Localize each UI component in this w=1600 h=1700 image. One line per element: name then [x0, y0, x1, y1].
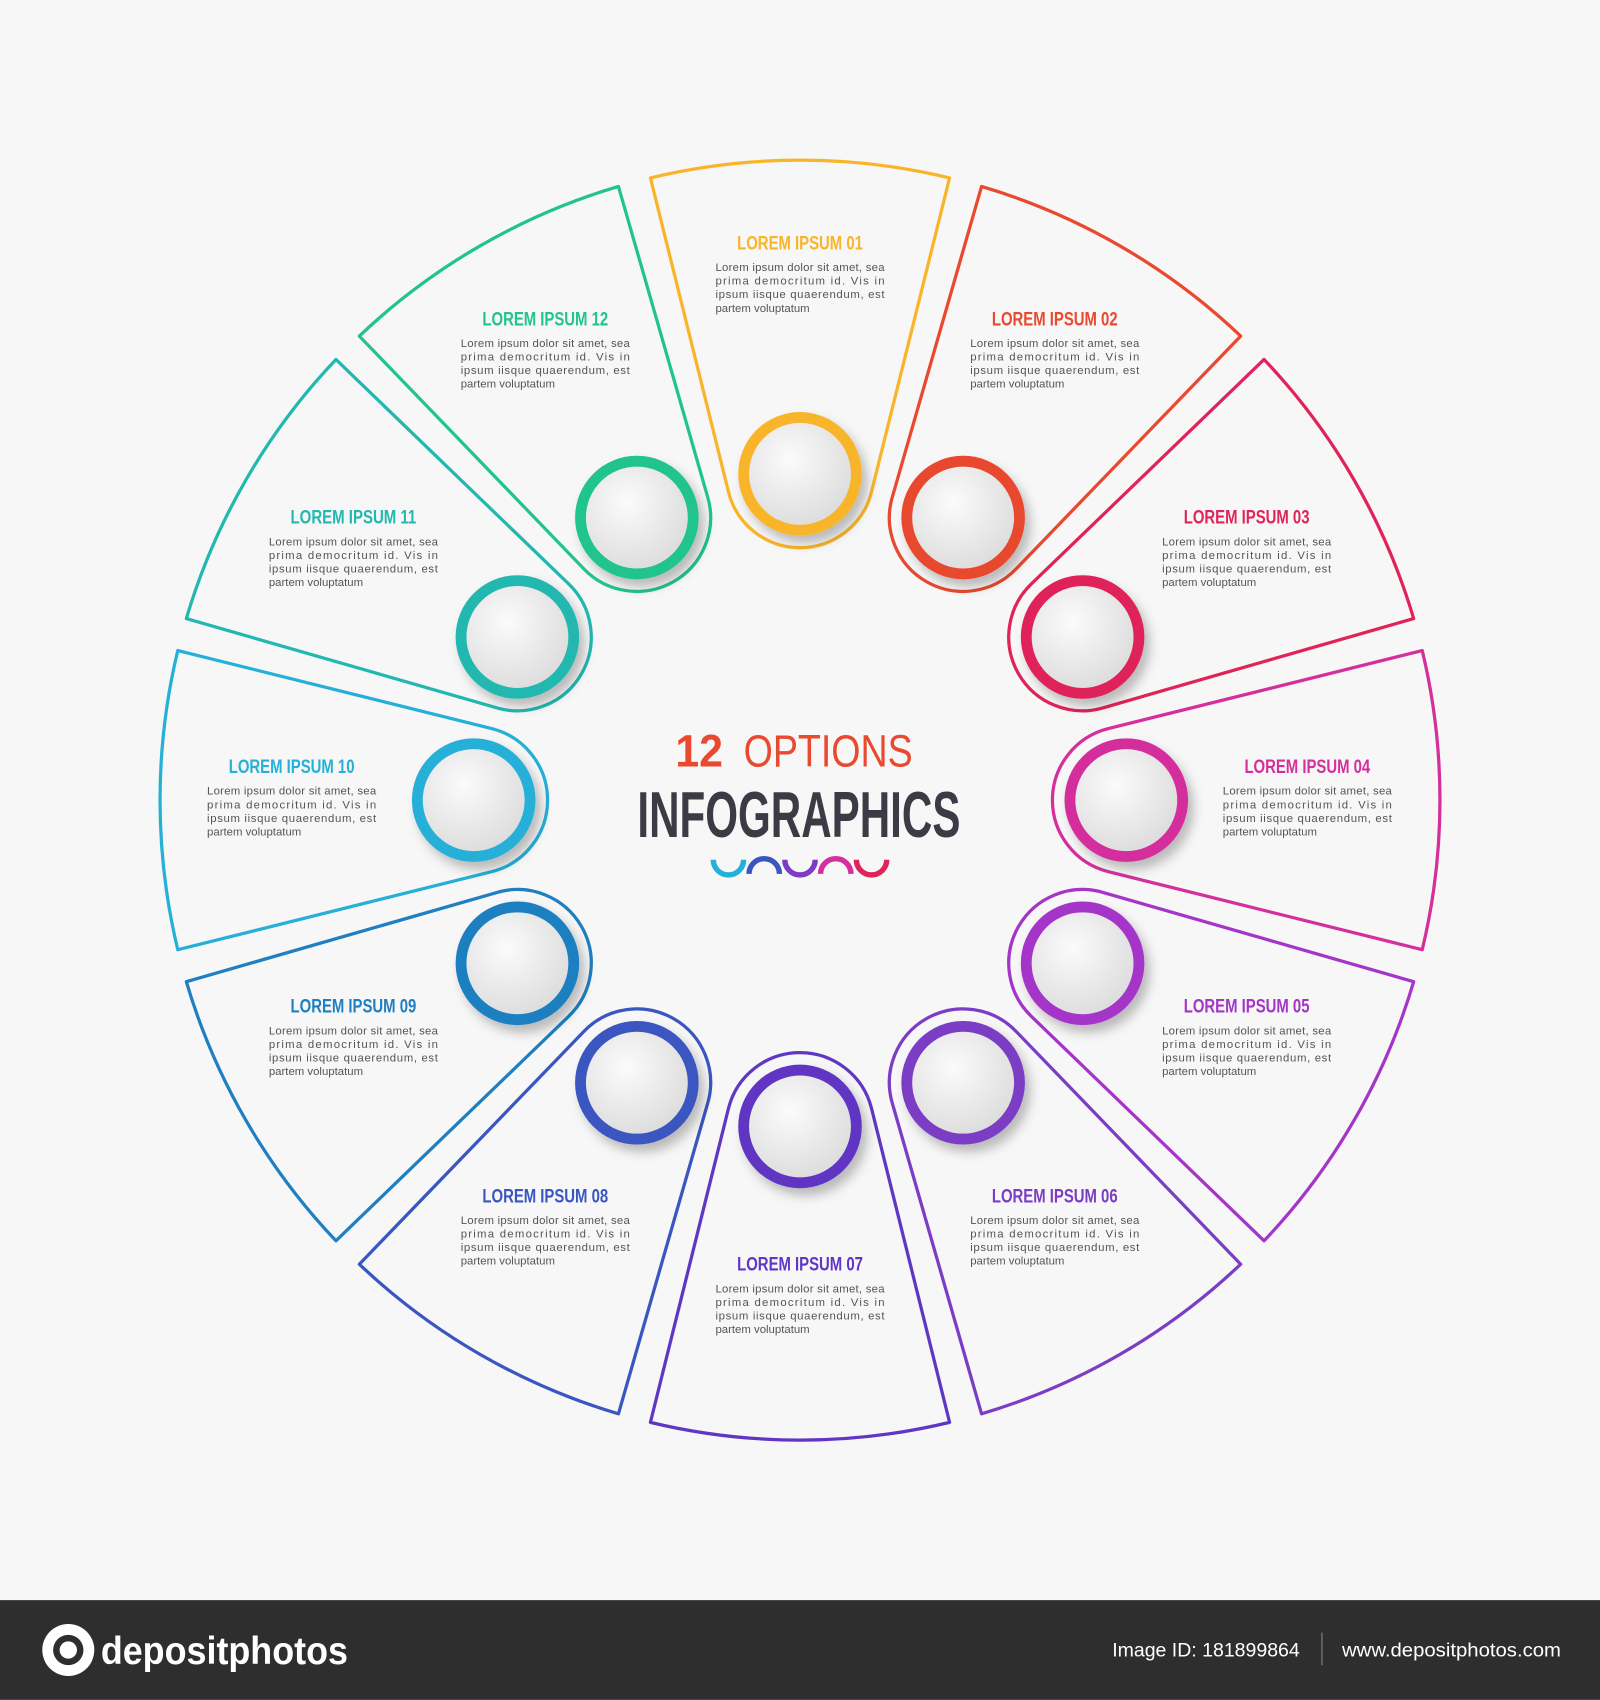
text 12: partem voluptatum	[461, 379, 555, 391]
segment 02	[797, 171, 1250, 656]
text 09: prima democritum id. Vis in	[269, 1039, 438, 1051]
footer: Image ID: 181899864	[1112, 1640, 1300, 1662]
node 04	[1064, 738, 1188, 862]
center title: INFOGRAPHICS	[637, 778, 960, 851]
text 10: prima democritum id. Vis in	[207, 799, 376, 811]
text 11: prima democritum id. Vis in	[269, 550, 438, 562]
text 10: partem voluptatum	[207, 826, 301, 838]
text 07: Lorem ipsum dolor sit amet, sea	[715, 1283, 885, 1295]
segment 08	[350, 944, 803, 1429]
text 05: Lorem ipsum dolor sit amet, sea	[1162, 1025, 1332, 1037]
text 11: partem voluptatum	[269, 577, 363, 589]
text 01: partem voluptatum	[715, 303, 810, 315]
text 03: ipsum iisque quaerendum, est	[1162, 563, 1332, 575]
text 02: LOREM IPSUM 02	[992, 308, 1118, 330]
text 12: LOREM IPSUM 12	[482, 308, 608, 330]
node 12	[575, 456, 699, 579]
text 10: LOREM IPSUM 10	[229, 756, 355, 778]
node 03	[1021, 575, 1144, 699]
text 09: LOREM IPSUM 09	[291, 996, 416, 1018]
text 02	[970, 308, 1140, 391]
text 01: Lorem ipsum dolor sit amet, sea	[715, 262, 885, 274]
text 04: ipsum iisque quaerendum, est	[1223, 813, 1393, 825]
text 01	[715, 232, 885, 315]
text 07	[715, 1254, 885, 1336]
node 07	[738, 1065, 862, 1188]
text 02: prima democritum id. Vis in	[970, 352, 1139, 364]
text 08	[461, 1185, 631, 1268]
text 05: partem voluptatum	[1162, 1066, 1256, 1078]
nodes	[412, 412, 1188, 1188]
footer: www.depositphotos.com	[1341, 1640, 1561, 1662]
text 09: partem voluptatum	[269, 1066, 363, 1078]
text 07: ipsum iisque quaerendum, est	[715, 1310, 885, 1322]
text 03: LOREM IPSUM 03	[1184, 507, 1310, 529]
text 12: ipsum iisque quaerendum, est	[461, 365, 631, 377]
text 11: ipsum iisque quaerendum, est	[269, 563, 439, 575]
text 09: ipsum iisque quaerendum, est	[269, 1052, 439, 1064]
node 06	[901, 1021, 1025, 1145]
text 09	[269, 996, 439, 1078]
text 05: LOREM IPSUM 05	[1184, 996, 1310, 1018]
text 06	[970, 1185, 1140, 1268]
wave decoration	[713, 859, 887, 875]
segment 05	[944, 797, 1429, 1250]
segment 09	[171, 797, 656, 1250]
text 10	[207, 756, 377, 838]
text 05: prima democritum id. Vis in	[1162, 1039, 1331, 1051]
text 07: prima democritum id. Vis in	[715, 1297, 885, 1309]
text 12: Lorem ipsum dolor sit amet, sea	[461, 338, 630, 350]
text 11: LOREM IPSUM 11	[291, 507, 416, 529]
node 08	[575, 1021, 699, 1145]
text 05	[1162, 996, 1332, 1078]
text 08: partem voluptatum	[461, 1256, 555, 1268]
segments	[160, 160, 1440, 1440]
node 11	[456, 575, 579, 699]
segment 11	[171, 351, 656, 803]
text 04: LOREM IPSUM 04	[1244, 756, 1370, 778]
text 01: ipsum iisque quaerendum, est	[715, 289, 885, 301]
text 03: Lorem ipsum dolor sit amet, sea	[1162, 536, 1332, 548]
text 11	[269, 507, 439, 589]
text 07: partem voluptatum	[715, 1324, 810, 1336]
segment 07	[650, 1053, 950, 1440]
text 05: ipsum iisque quaerendum, est	[1162, 1052, 1332, 1064]
segment 06	[797, 944, 1250, 1429]
footer: depositphotos	[101, 1630, 348, 1673]
text 06: partem voluptatum	[970, 1256, 1064, 1268]
node 10	[412, 738, 536, 862]
text 07: LOREM IPSUM 07	[737, 1254, 863, 1276]
segment 12	[350, 171, 803, 656]
text 09: Lorem ipsum dolor sit amet, sea	[269, 1025, 439, 1037]
text 12	[461, 308, 631, 391]
text 02: Lorem ipsum dolor sit amet, sea	[970, 338, 1140, 350]
text 12: prima democritum id. Vis in	[461, 352, 630, 364]
text 10: Lorem ipsum dolor sit amet, sea	[207, 786, 377, 798]
center title	[637, 726, 960, 851]
text 08: LOREM IPSUM 08	[482, 1185, 608, 1207]
node 09	[456, 901, 579, 1025]
node 02	[901, 456, 1025, 579]
text 10: ipsum iisque quaerendum, est	[207, 813, 377, 825]
text 04: Lorem ipsum dolor sit amet, sea	[1223, 786, 1393, 798]
node 05	[1021, 901, 1144, 1025]
text 01: LOREM IPSUM 01	[737, 232, 863, 254]
text 01: prima democritum id. Vis in	[715, 276, 885, 288]
text 03	[1162, 507, 1332, 589]
text 04: prima democritum id. Vis in	[1223, 799, 1392, 811]
text 08: Lorem ipsum dolor sit amet, sea	[461, 1215, 630, 1227]
text 03: prima democritum id. Vis in	[1162, 550, 1331, 562]
segment 01	[650, 160, 950, 548]
text 11: Lorem ipsum dolor sit amet, sea	[269, 536, 439, 548]
text 04	[1223, 756, 1393, 838]
text 03: partem voluptatum	[1162, 577, 1256, 589]
text 06: ipsum iisque quaerendum, est	[970, 1242, 1140, 1254]
text 02: partem voluptatum	[970, 379, 1064, 391]
text 06: Lorem ipsum dolor sit amet, sea	[970, 1215, 1140, 1227]
node 01	[738, 412, 862, 536]
segment 04	[1052, 651, 1440, 950]
text 08: ipsum iisque quaerendum, est	[461, 1242, 631, 1254]
center title: 12	[675, 726, 723, 777]
text 06: prima democritum id. Vis in	[970, 1229, 1139, 1241]
footer	[0, 1600, 1600, 1700]
text 06: LOREM IPSUM 06	[992, 1185, 1118, 1207]
segment 03	[944, 351, 1429, 803]
text 08: prima democritum id. Vis in	[461, 1229, 630, 1241]
segment 10	[160, 651, 548, 950]
text 04: partem voluptatum	[1223, 826, 1317, 838]
center title: OPTIONS	[744, 726, 913, 777]
text 02: ipsum iisque quaerendum, est	[970, 365, 1140, 377]
